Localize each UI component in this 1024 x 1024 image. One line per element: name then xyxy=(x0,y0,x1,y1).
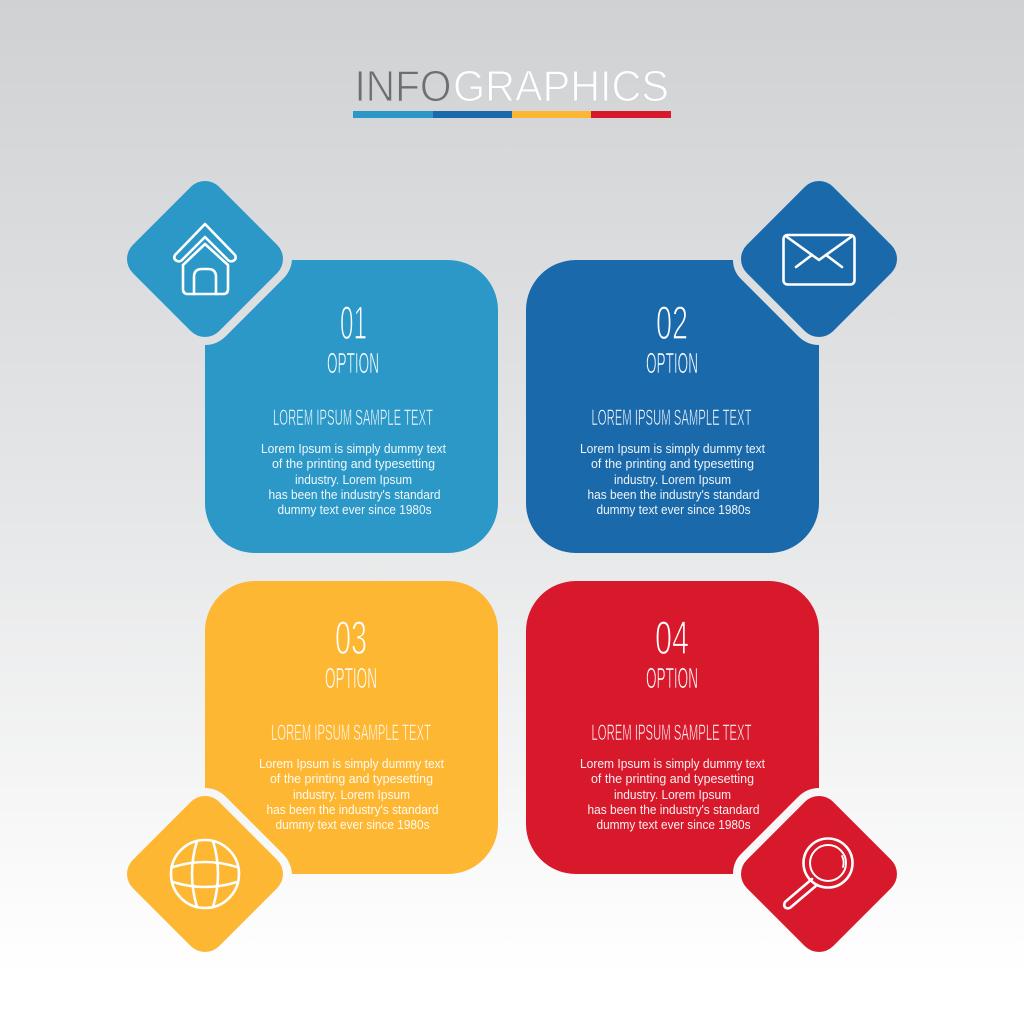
body text: has been the industry's standard xyxy=(588,488,760,502)
body text: Lorem Ipsum is simply dummy text xyxy=(580,442,765,456)
icon: magnifier xyxy=(784,838,852,908)
number 02: 02 xyxy=(656,296,688,349)
panel: option 04: OPTION xyxy=(646,663,698,695)
body text: dummy text ever since 1980s xyxy=(278,503,432,517)
panel: option 03 xyxy=(205,581,498,874)
panel: option 03: OPTION xyxy=(325,663,377,695)
body text: Lorem Ipsum is simply dummy text xyxy=(580,757,765,771)
body text: of the printing and typesetting xyxy=(270,772,433,786)
subheading: LOREM IPSUM SAMPLE TEXT xyxy=(592,405,752,430)
body text xyxy=(259,757,444,832)
body text: dummy text ever since 1980s xyxy=(596,818,750,832)
body text: has been the industry's standard xyxy=(266,803,438,817)
body text: of the printing and typesetting xyxy=(272,457,435,471)
body text: of the printing and typesetting xyxy=(591,772,754,786)
number 03: 03 xyxy=(335,611,367,664)
body text: industry. Lorem Ipsum xyxy=(614,788,731,802)
title xyxy=(354,62,669,111)
body text xyxy=(580,757,765,832)
body text xyxy=(580,442,765,517)
diamond: globe xyxy=(119,788,291,960)
panel: option 01: OPTION xyxy=(327,348,379,380)
panel: option 02: OPTION xyxy=(646,348,698,380)
body text: dummy text ever since 1980s xyxy=(276,818,430,832)
body text: has been the industry's standard xyxy=(268,488,440,502)
subheading: LOREM IPSUM SAMPLE TEXT xyxy=(592,720,752,745)
title word: GRAPHICS: GRAPHICS xyxy=(453,62,669,111)
body text: of the printing and typesetting xyxy=(591,457,754,471)
diamond: mail xyxy=(733,173,905,345)
subheading: LOREM IPSUM SAMPLE TEXT xyxy=(271,720,431,745)
title word: INFO: INFO xyxy=(354,62,452,111)
body text: dummy text ever since 1980s xyxy=(596,503,750,517)
subheading: LOREM IPSUM SAMPLE TEXT xyxy=(273,405,433,430)
number 04: 04 xyxy=(655,611,689,664)
body text xyxy=(261,442,446,517)
title underline xyxy=(353,111,671,118)
body text: industry. Lorem Ipsum xyxy=(293,788,410,802)
diamond: search xyxy=(733,788,905,960)
icon: home xyxy=(174,224,236,294)
panel: option 04 xyxy=(526,581,819,874)
panel: option 02 xyxy=(526,260,819,553)
body text: has been the industry's standard xyxy=(588,803,760,817)
icon: envelope xyxy=(784,235,854,284)
panel: option 01 xyxy=(205,260,498,553)
body text: industry. Lorem Ipsum xyxy=(295,473,412,487)
diamond: home xyxy=(119,173,291,345)
icon: globe xyxy=(171,840,239,908)
body text: Lorem Ipsum is simply dummy text xyxy=(259,757,444,771)
number 01: 01 xyxy=(340,296,367,349)
body text: industry. Lorem Ipsum xyxy=(614,473,731,487)
body text: Lorem Ipsum is simply dummy text xyxy=(261,442,446,456)
